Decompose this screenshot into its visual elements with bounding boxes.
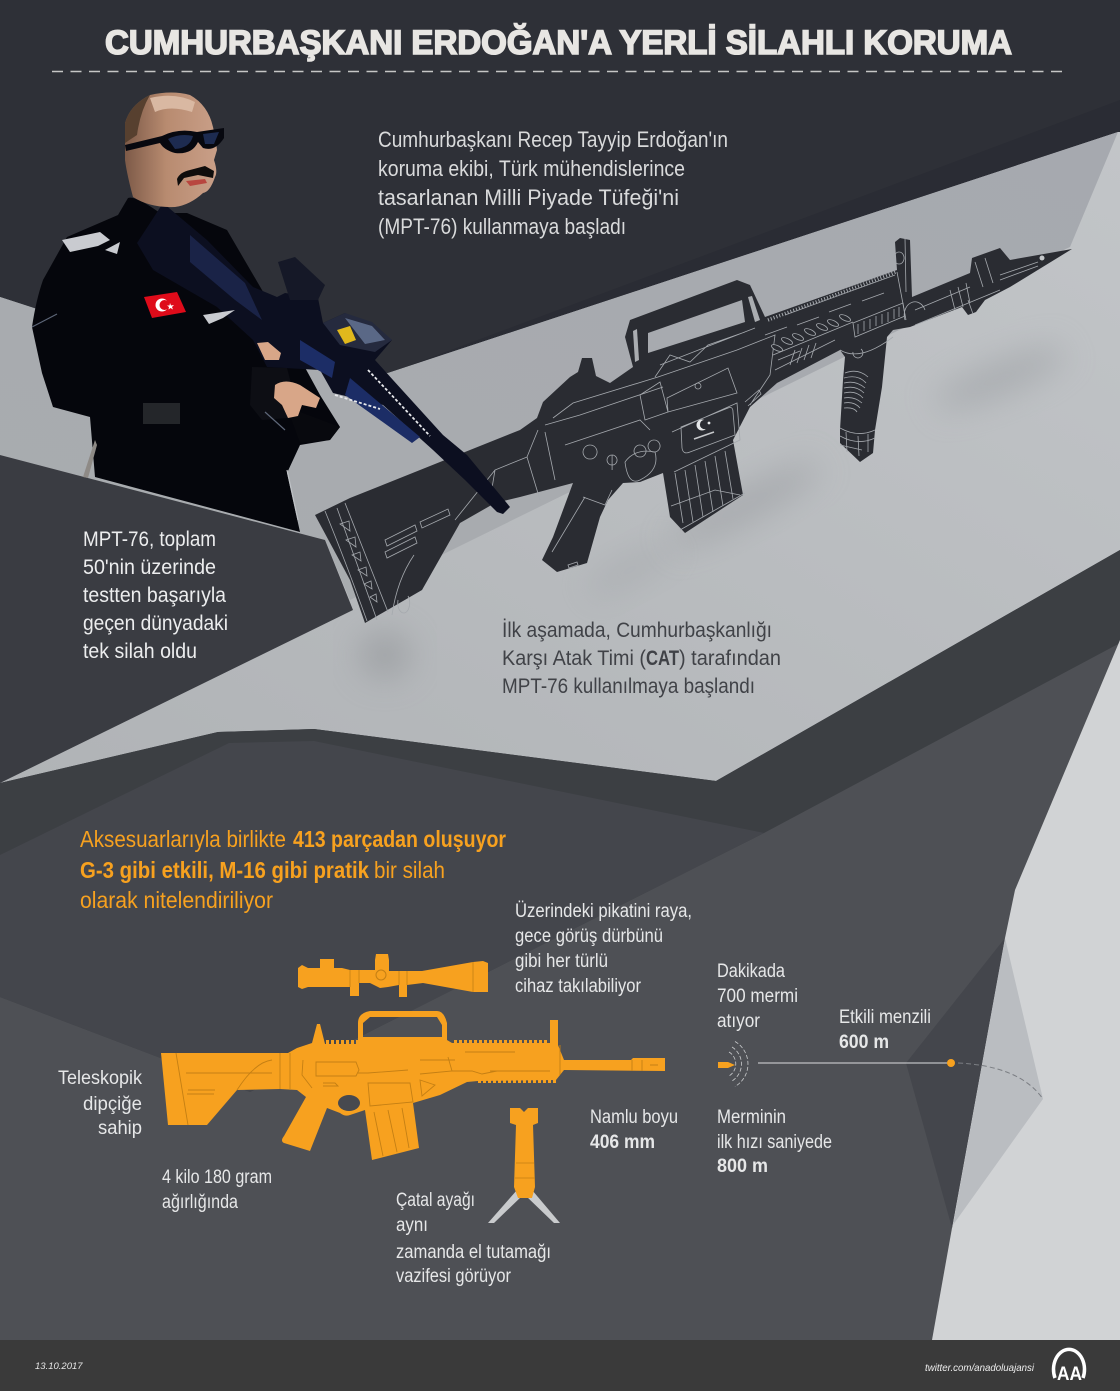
heading: orange summary: Aksesuarlarıyla birlikte bbox=[80, 826, 286, 852]
heading: orange summary bbox=[80, 826, 506, 913]
photo: armed guard with Turkish flag patch bbox=[32, 92, 510, 532]
text block: picatinny rail: gibi her türlü bbox=[515, 951, 608, 972]
text block: test record: MPT-76, toplam bbox=[83, 528, 216, 551]
icon: AA logo bbox=[1053, 1349, 1084, 1385]
label: weight: 4 kilo 180 gram bbox=[162, 1167, 272, 1188]
text block: picatinny rail bbox=[515, 901, 692, 997]
label: effective range bbox=[839, 1007, 931, 1053]
text block: intro: koruma ekibi, Türk mühendislerince bbox=[378, 156, 685, 181]
label: bipod grip bbox=[396, 1190, 551, 1287]
text block: first phase CAT: CAT bbox=[646, 647, 679, 670]
label: rate of fire: Dakikada bbox=[717, 961, 785, 982]
label: telescopic stock bbox=[58, 1068, 142, 1139]
label: muzzle velocity: 800 m bbox=[717, 1156, 768, 1177]
label: effective range: Etkili menzili bbox=[839, 1007, 931, 1028]
footer bar bbox=[0, 1340, 1120, 1391]
text block: picatinny rail: Üzerindeki pikatini raya, bbox=[515, 901, 692, 922]
label: bipod grip: vazifesi görüyor bbox=[396, 1266, 512, 1287]
label: weight bbox=[162, 1167, 272, 1213]
date: 13.10.2017 bbox=[35, 1361, 83, 1372]
label: muzzle velocity: ilk hızı saniyede bbox=[717, 1132, 832, 1153]
heading: orange summary: G-3 gibi etkili, M-16 gibi pratik bbox=[80, 857, 369, 883]
text block: first phase CAT: İlk aşamada, Cumhurbaşkanlığı bbox=[502, 619, 772, 642]
label: telescopic stock: sahip bbox=[98, 1118, 142, 1139]
text block: intro bbox=[378, 127, 728, 239]
text block: test record: tek silah oldu bbox=[83, 640, 197, 663]
label: barrel length bbox=[590, 1107, 678, 1153]
label: barrel length: Namlu boyu bbox=[590, 1107, 678, 1128]
label: rate of fire bbox=[717, 961, 798, 1032]
heading: orange summary: olarak nitelendiriliyor bbox=[80, 887, 273, 913]
icon: Turkish flag patch bbox=[144, 292, 186, 318]
text block: first phase CAT: ) tarafından bbox=[679, 647, 781, 670]
text block: first phase CAT bbox=[502, 619, 781, 698]
icon: crescent and star emblem bbox=[694, 420, 714, 439]
text block: picatinny rail: cihaz takılabiliyor bbox=[515, 976, 642, 997]
label: bipod grip: zamanda el tutamağı bbox=[396, 1242, 551, 1263]
heading: orange summary: 413 parçadan oluşuyor bbox=[293, 826, 506, 852]
footer: twitter handle: twitter.com/anadoluajansi bbox=[925, 1362, 1035, 1374]
title: CUMHURBAŞKANI ERDOĞAN'A YERLİ SİLAHLI KORUMA bbox=[105, 24, 1012, 62]
text block: first phase CAT: MPT-76 kullanılmaya başlandı bbox=[502, 675, 755, 698]
icon: bullet trajectory bbox=[718, 1042, 1043, 1099]
heading: orange summary: bir silah bbox=[374, 857, 445, 883]
label: muzzle velocity bbox=[717, 1107, 832, 1177]
label: muzzle velocity: Merminin bbox=[717, 1107, 786, 1128]
label: rate of fire: 700 mermi bbox=[717, 986, 798, 1007]
text block: test record bbox=[83, 528, 228, 663]
text block: first phase CAT: Karşı Atak Timi ( bbox=[502, 647, 646, 670]
icon: orange rifle bbox=[161, 1011, 665, 1160]
label: telescopic stock: dipçiğe bbox=[83, 1094, 142, 1115]
label: effective range: 600 m bbox=[839, 1032, 889, 1053]
icon: orange scope bbox=[298, 954, 488, 997]
illustration: large rifle line drawing with bayonet bbox=[315, 238, 1072, 623]
text block: intro: tasarlanan Milli Piyade Tüfeği'ni bbox=[378, 185, 679, 210]
text block: test record: geçen dünyadaki bbox=[83, 612, 228, 635]
label: rate of fire: atıyor bbox=[717, 1011, 761, 1032]
text block: intro: Cumhurbaşkanı Recep Tayyip Erdoğan'ın bbox=[378, 127, 728, 152]
label: weight: ağırlığında bbox=[162, 1192, 238, 1213]
text block: test record: testten başarıyla bbox=[83, 584, 226, 607]
label: bipod grip: aynı bbox=[396, 1215, 428, 1236]
text block: picatinny rail: gece görüş dürbünü bbox=[515, 926, 663, 947]
text block: test record: 50'nin üzerinde bbox=[83, 556, 216, 579]
icon: orange foregrip bipod bbox=[488, 1108, 560, 1223]
head bbox=[125, 92, 217, 207]
label: barrel length: 406 mm bbox=[590, 1132, 655, 1153]
icon: AA logo: AA bbox=[1057, 1364, 1082, 1385]
text block: intro: (MPT-76) kullanmaya başladı bbox=[378, 214, 626, 239]
label: telescopic stock: Teleskopik bbox=[58, 1068, 142, 1089]
label: bipod grip: Çatal ayağı bbox=[396, 1190, 475, 1211]
